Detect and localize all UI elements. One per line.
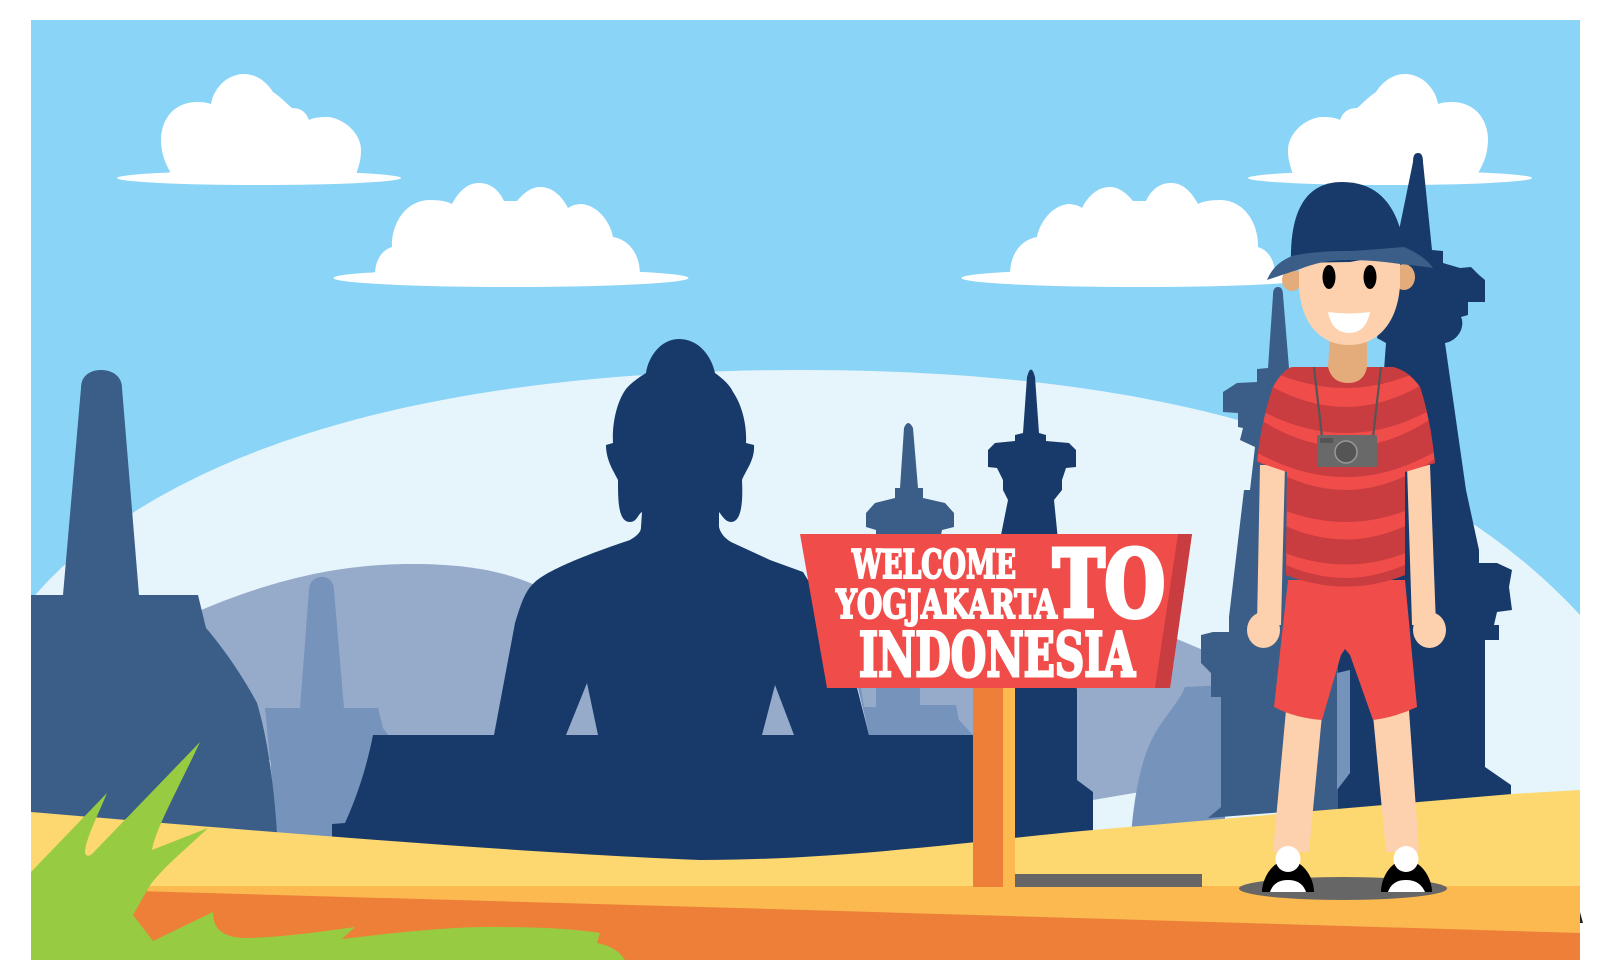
left shoe (1262, 846, 1314, 892)
sign text indonesia: INDONESIA (859, 620, 1136, 691)
eyes (1322, 265, 1376, 289)
Buddha silhouette (332, 339, 980, 870)
sky background (31, 20, 1580, 615)
right navy temple tower (1334, 153, 1512, 830)
sign text to: TO (1053, 530, 1165, 638)
left leg (1273, 710, 1322, 852)
right leg (1373, 710, 1419, 852)
right blue-grey hill (1077, 639, 1211, 800)
cloud centre right (962, 183, 1316, 287)
face (1299, 255, 1400, 345)
sign text yogjakarta: YOGJAKARTA (835, 582, 1058, 628)
left mid-blue temple tower behind man (1201, 287, 1310, 818)
small stupa centre (866, 423, 954, 540)
gap between arm and torso right (762, 685, 794, 735)
hat dome (1291, 182, 1405, 263)
signpost (973, 686, 1015, 887)
smile (1328, 312, 1370, 333)
striped shirt (1240, 340, 1450, 600)
sign text welcome: WELCOME (851, 542, 1016, 588)
neck (1328, 335, 1367, 383)
man shadow (1239, 877, 1447, 900)
ground dark orange band (133, 891, 1580, 960)
gap between arm and torso left (566, 683, 598, 735)
ears (1282, 264, 1415, 291)
black edge speck (1580, 912, 1583, 923)
sandy ground (31, 790, 1580, 886)
hat brim (1267, 247, 1433, 280)
signpost shadow (1015, 874, 1202, 887)
grass (31, 742, 625, 960)
light blue temple left (265, 577, 392, 850)
light blue temple right (1131, 685, 1225, 835)
strip between legs (1312, 666, 1350, 812)
right shoe (1381, 846, 1432, 892)
pale distant hill (35, 370, 1580, 830)
left arm (1247, 465, 1285, 648)
tourist man (1240, 182, 1450, 892)
lower stupa base behind sign (858, 688, 973, 735)
camera strap (1314, 367, 1381, 437)
cloud centre left (334, 183, 688, 287)
navy stupa centre (988, 370, 1093, 850)
welcome sign (800, 530, 1192, 691)
right arm (1407, 465, 1446, 648)
back blue-grey hill (190, 564, 545, 760)
cloud top left (117, 74, 401, 185)
cloud top right (1248, 74, 1532, 185)
mid-blue temple far left (31, 370, 278, 850)
ground light orange band (146, 886, 1580, 933)
camera (1317, 435, 1377, 467)
shorts (1274, 580, 1417, 720)
